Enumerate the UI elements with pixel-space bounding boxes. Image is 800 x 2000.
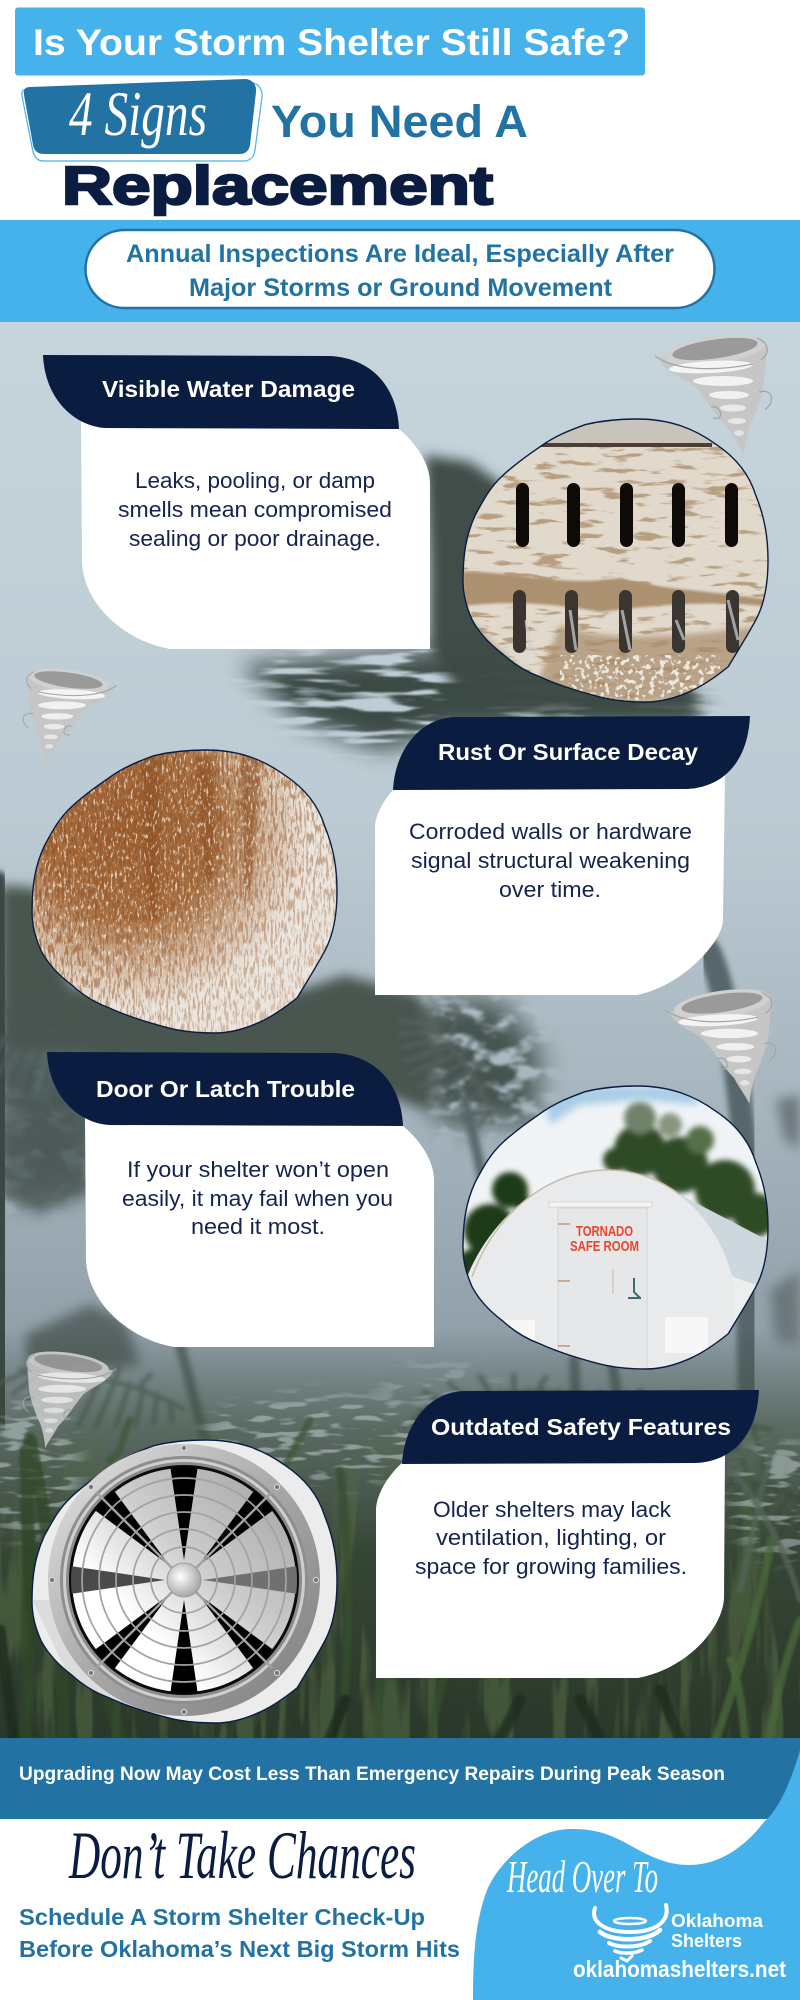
tornado icon left upper <box>23 664 116 764</box>
tornado icon left lower <box>23 1347 116 1448</box>
body text: need it most. <box>191 1214 325 1239</box>
card: Door Or Latch Trouble: Door Or Latch Trouble <box>96 1076 355 1102</box>
heading: Replacement: Replacement <box>62 156 493 216</box>
card: Visible Water Damage: Visible Water Damage <box>102 376 355 402</box>
body text: over time. <box>499 877 601 902</box>
photo: rust <box>32 750 337 1033</box>
card: Outdated Safety Features <box>376 1390 759 1678</box>
inspection banner <box>0 220 800 322</box>
corner wave panel <box>473 1750 800 2000</box>
body text: If your shelter won’t open <box>127 1157 389 1182</box>
logo wordmark: Oklahoma <box>671 1911 764 1931</box>
cost banner <box>0 1738 800 1819</box>
script: Head Over To: Head Over To <box>506 1851 658 1902</box>
body text <box>122 1157 393 1239</box>
body text: space for growing families. <box>415 1554 687 1579</box>
palm trunks <box>0 880 750 1450</box>
photo: tornado safe room door <box>457 1086 777 1373</box>
body text: Corroded walls or hardware <box>409 819 692 844</box>
body text <box>409 819 692 902</box>
cost banner: Upgrading Now May Cost Less Than Emergency Repairs During Peak Season <box>19 1763 725 1785</box>
vegetation <box>0 1330 800 1739</box>
body text: signal structural weakening <box>411 848 690 873</box>
title banner <box>15 8 645 76</box>
card: Rust Or Surface Decay <box>375 716 750 995</box>
body text <box>118 468 392 551</box>
card: Door Or Latch Trouble <box>47 1052 434 1347</box>
card: Visible Water Damage <box>43 355 430 649</box>
body text: easily, it may fail when you <box>122 1186 393 1211</box>
body text: Older shelters may lack <box>433 1497 672 1522</box>
badge: 4 Signs <box>22 78 262 161</box>
call to action: Schedule A Storm Shelter Check-Up <box>19 1904 425 1930</box>
call to action: Before Oklahoma’s Next Big Storm Hits <box>19 1936 460 1962</box>
logo wordmark: Shelters <box>671 1931 742 1951</box>
logo: Oklahoma Shelters <box>594 1905 764 1961</box>
inspection banner: Major Storms or Ground Movement <box>189 274 613 302</box>
photo: tornado safe room door: SAFE ROOM <box>570 1238 639 1255</box>
logo wordmark <box>671 1911 764 1951</box>
storm photo background <box>0 322 800 1739</box>
frond textures <box>240 650 705 750</box>
badge: 4 Signs: 4 Signs <box>69 78 207 149</box>
photo: water damage <box>463 419 768 702</box>
icon: tornado logo <box>594 1905 667 1961</box>
heading: You Need A: You Need A <box>271 96 528 147</box>
fronds <box>0 1007 800 1506</box>
call to action <box>19 1904 460 1962</box>
tornado icon right middle <box>665 984 776 1104</box>
body text: smells mean compromised <box>118 497 392 522</box>
body text <box>415 1497 687 1579</box>
body text: ventilation, lighting, or <box>436 1525 666 1550</box>
body text: Leaks, pooling, or damp <box>135 468 375 493</box>
photo: tornado safe room door: TORNADO <box>576 1223 633 1240</box>
inspection banner: Annual Inspections Are Ideal, Especially After <box>126 240 674 268</box>
card: Rust Or Surface Decay: Rust Or Surface Decay <box>438 739 698 765</box>
tornado icon top right <box>655 329 772 455</box>
title banner: Is Your Storm Shelter Still Safe? <box>33 22 630 63</box>
photo: ventilation fan <box>32 1440 337 1723</box>
card: Outdated Safety Features: Outdated Safety Features <box>431 1414 731 1440</box>
body text: sealing or poor drainage. <box>129 526 381 551</box>
script heading: Don't Take Chances: Don’t Take Chances <box>68 1817 416 1893</box>
